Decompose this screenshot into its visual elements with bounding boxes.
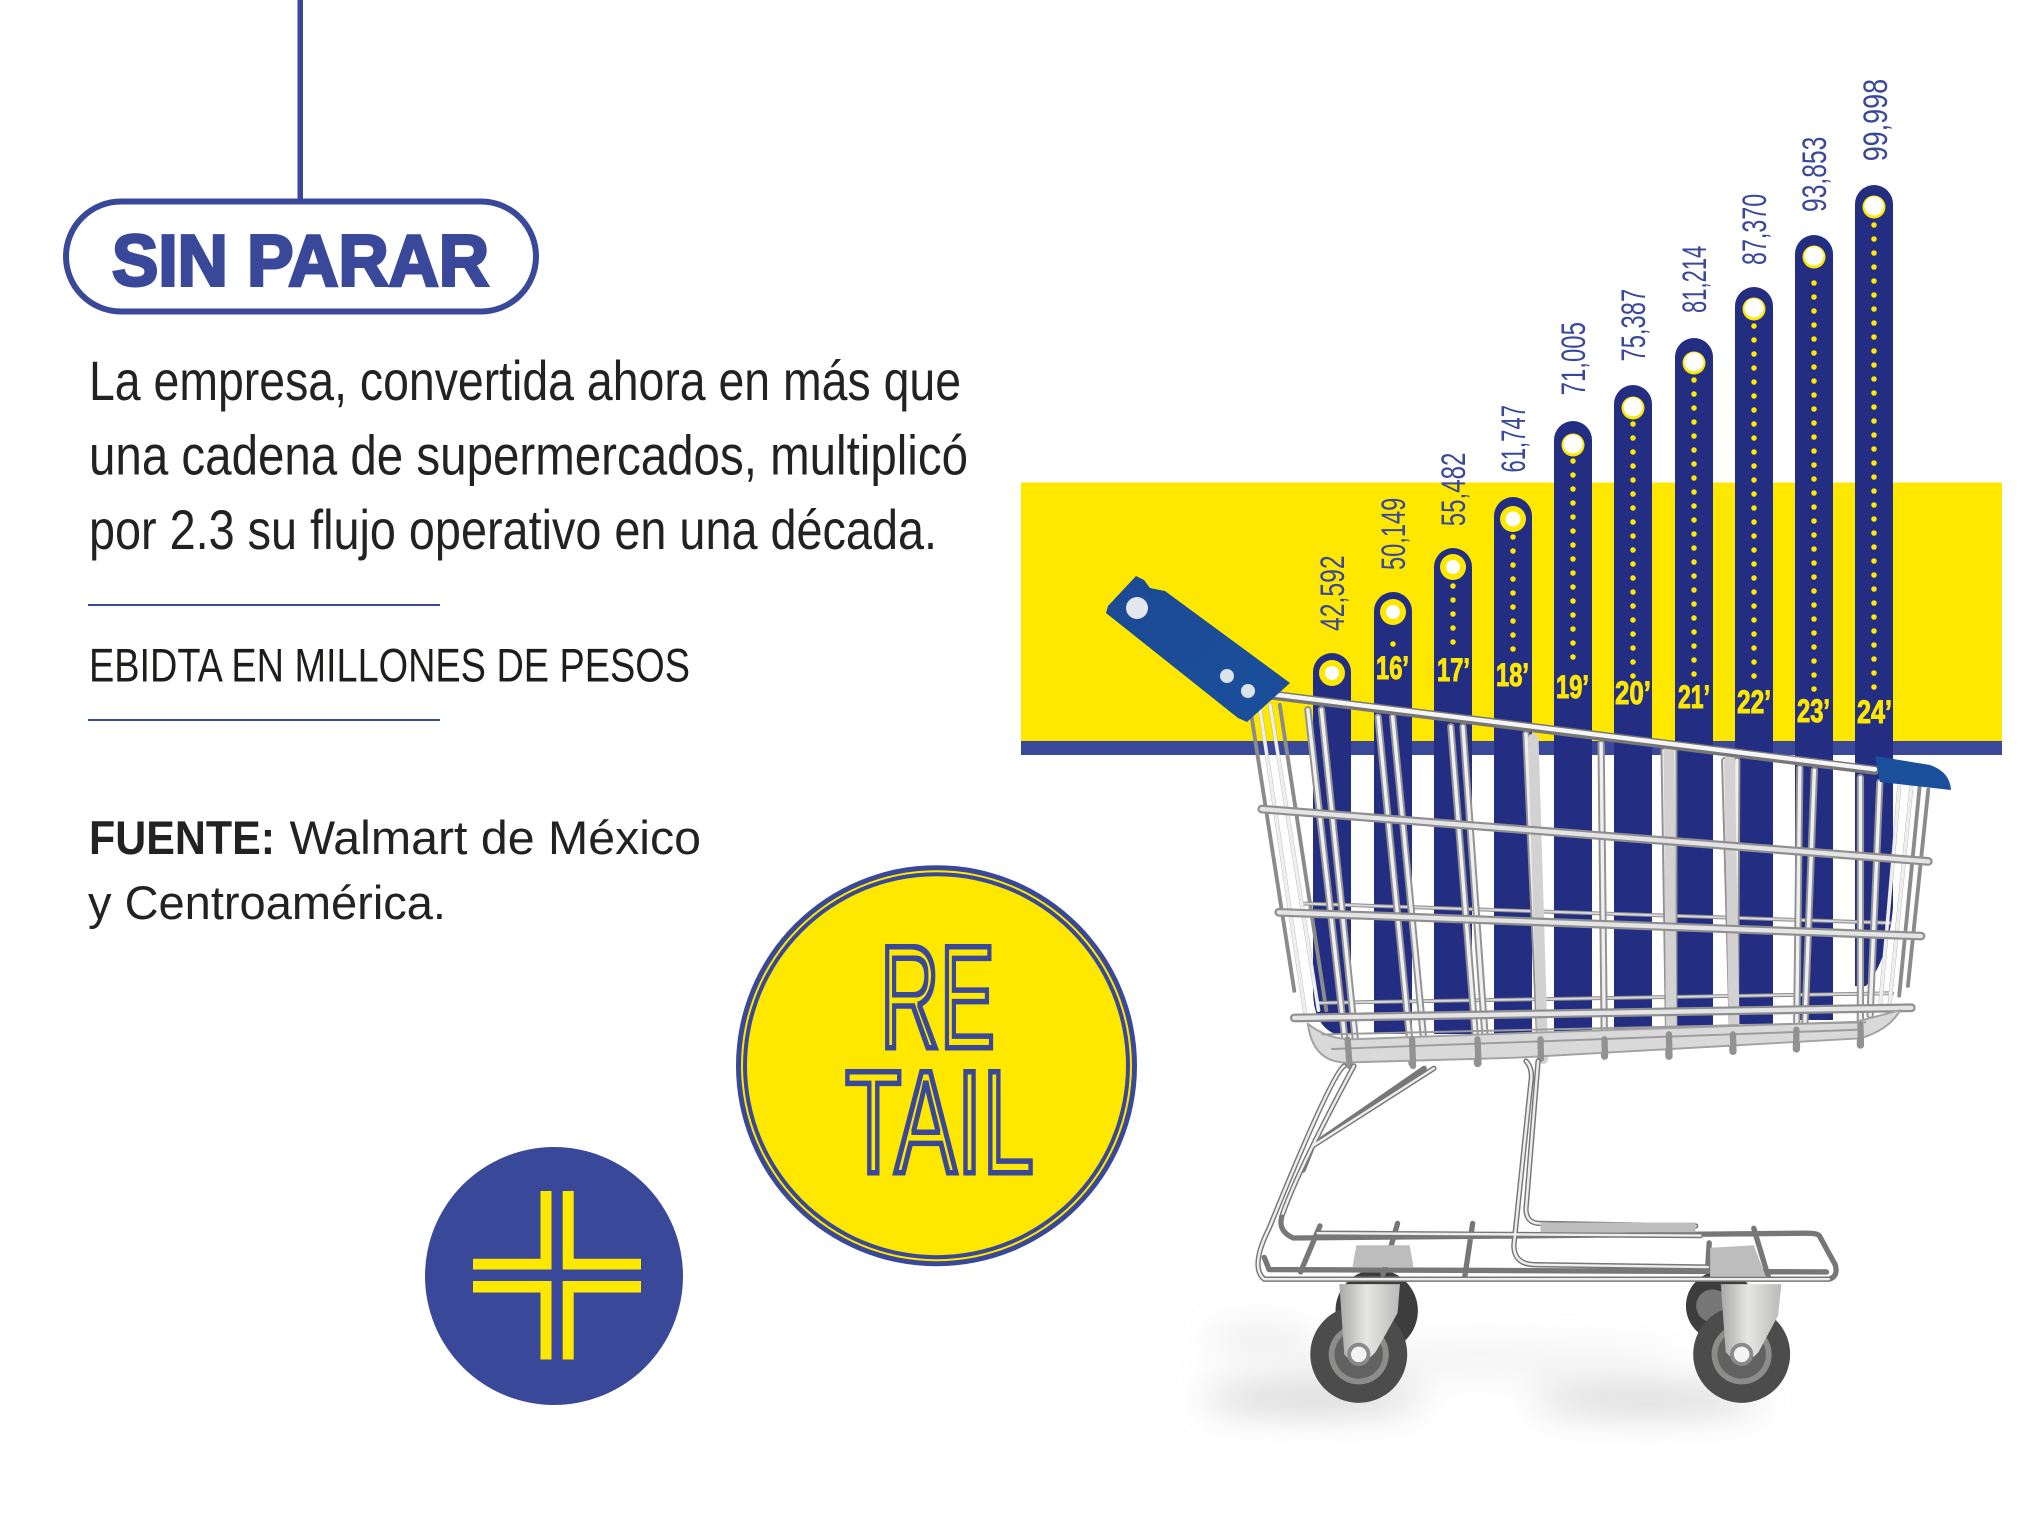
year labels: [1376, 650, 1892, 730]
value labels: 75,387: [1615, 289, 1653, 362]
floor shadow: [1201, 1333, 1763, 1411]
description text: La empresa, convertida ahora en más que: [89, 349, 961, 412]
year labels: 16’: [1376, 650, 1409, 686]
value labels: 93,853: [1796, 137, 1834, 212]
year labels: 18’: [1496, 657, 1529, 693]
back rear wheels: [1335, 1270, 1756, 1352]
top rail: [1272, 694, 1875, 770]
bars: [1313, 185, 1893, 1034]
value labels: 81,214: [1676, 246, 1714, 313]
source note: [88, 811, 701, 929]
front wheels: [1310, 1284, 1790, 1403]
badge: retail: TAIL: [845, 1040, 1034, 1204]
value labels: 55,482: [1435, 453, 1473, 526]
year labels: 21’: [1678, 679, 1710, 715]
value labels: 87,370: [1736, 194, 1774, 265]
basket wires: [1250, 705, 1928, 1066]
shopping cart illustration: [1106, 576, 1951, 1411]
cart wires and frame: [1250, 694, 1928, 1403]
value labels: 99,998: [1857, 79, 1895, 161]
value labels: 71,005: [1555, 322, 1593, 395]
source note: Walmart de México: [290, 811, 701, 864]
icon: plus badge: [425, 1147, 683, 1405]
blue base strip: [1021, 741, 2002, 755]
description text: una cadena de supermercados, multiplicó: [89, 424, 968, 486]
badge: retail: [736, 865, 1137, 1266]
value labels: 42,592: [1314, 555, 1352, 631]
legs and base frame: [1258, 1061, 1836, 1279]
year labels: 24’: [1857, 694, 1892, 730]
value labels: 61,747: [1495, 405, 1533, 472]
connector line: [298, 0, 303, 200]
chart subtitle: EBIDTA EN MILLONES DE PESOS: [89, 638, 690, 692]
year labels: 22’: [1737, 684, 1771, 720]
year labels: 19’: [1556, 669, 1589, 705]
data point markers: [1319, 196, 1886, 686]
cart handle grip left: [1106, 576, 1290, 722]
bar chart: EBITDA by year: [1313, 79, 1895, 1034]
description text: por 2.3 su flujo operativo en una década.: [89, 498, 937, 561]
badge: retail: RE: [880, 916, 995, 1078]
value labels: [1314, 79, 1895, 631]
title pill: SIN PARAR: [112, 222, 489, 302]
year labels: 20’: [1615, 675, 1651, 711]
source note: FUENTE:: [89, 811, 275, 864]
badge: retail: RE: [880, 916, 995, 1078]
description text: [89, 349, 968, 561]
title pill: [66, 202, 536, 312]
value labels: 50,149: [1375, 498, 1413, 570]
yellow background band: [1021, 482, 2002, 742]
year labels: 17’: [1437, 652, 1470, 688]
year labels: 23’: [1797, 693, 1830, 729]
source note: y Centroamérica.: [88, 876, 446, 929]
cart handle grip right: [1875, 756, 1951, 790]
badge: retail: TAIL: [845, 1040, 1034, 1204]
dotted lines: [1393, 225, 1874, 696]
